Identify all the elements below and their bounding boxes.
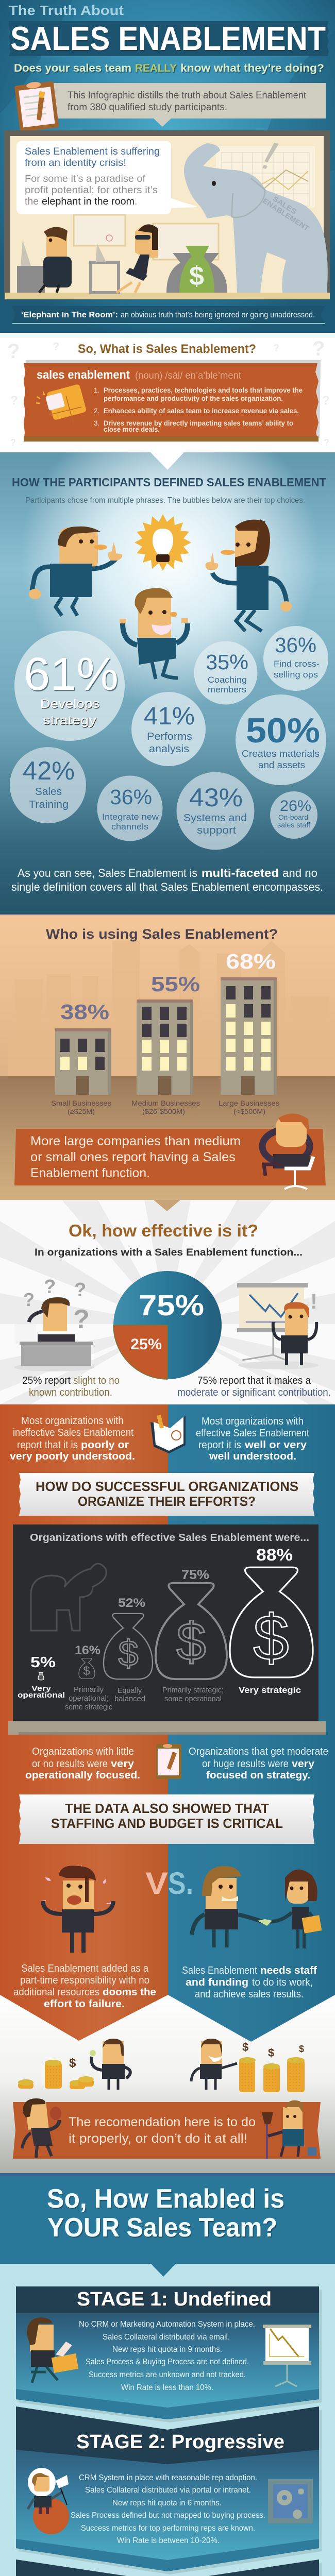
stage text: Success metrics for top performing reps are known. <box>81 2524 255 2533</box>
bubble 26%: On-board <box>278 814 308 821</box>
right results text <box>189 1746 328 1781</box>
definition list <box>94 386 303 433</box>
faint question marks: ? <box>10 437 16 448</box>
bag 52%: 52% <box>118 1596 145 1610</box>
bubble 61% <box>14 631 125 741</box>
pointer <box>154 1200 180 1211</box>
bag 52%: $ <box>119 1633 138 1673</box>
panel: stage 3 <box>16 2560 322 2576</box>
stage text: New reps hit quota in 6 months. <box>112 2499 222 2507</box>
recommendation banner <box>13 2098 321 2159</box>
faint question marks: ? <box>53 340 59 353</box>
stage text: Win Rate is between 10-20%. <box>117 2536 220 2545</box>
left caption <box>22 1375 120 1398</box>
bubble 35%: 35% <box>206 650 248 674</box>
speech bubble: identity crisis: profit potential; for others it’s <box>25 185 158 196</box>
bag 75%: $ <box>176 1612 206 1671</box>
panel: header <box>0 0 335 333</box>
callout box: large companies: More large companies than medium <box>30 1134 241 1148</box>
faint question marks <box>7 337 330 448</box>
chalkboard labels: balanced <box>114 1694 145 1703</box>
pie chart: 75% <box>139 1289 204 1322</box>
bag 88%: $ <box>253 1602 289 1674</box>
speech bubble: identity crisis: Sales Enablement is suffering <box>25 146 160 157</box>
tagline: Does your sales team <box>14 62 131 74</box>
bubble 36% cross-selling: selling ops <box>274 670 318 680</box>
left understanding text: Most organizations with <box>21 1415 124 1427</box>
bubble 36% channels <box>97 776 163 841</box>
versus label: V <box>145 1866 168 1901</box>
stage text: Success metrics are unknown and not tracked. <box>89 2370 246 2379</box>
chalkboard labels: Very <box>31 1684 52 1693</box>
building small: (≥$25M) <box>68 1107 95 1115</box>
left caption: known contribution. <box>29 1387 112 1398</box>
bubble 26%: 26% <box>280 798 311 815</box>
worried man at desk: ? <box>74 1279 86 1301</box>
right staffing text: Sales Enablement <box>182 1965 257 1976</box>
faint question marks: ? <box>312 337 325 360</box>
summary text: multi-faceted <box>202 867 279 879</box>
ribbon heading: staffing and budget <box>19 1794 314 1844</box>
stage text <box>79 2320 255 2392</box>
left caption: 25% report <box>22 1375 71 1386</box>
money bags: $ <box>189 261 204 291</box>
bag 16%: 16% <box>75 1643 100 1657</box>
astronaut on planet <box>28 2468 69 2534</box>
heading line 2: YOUR Sales Team? <box>47 2213 277 2243</box>
panel: elephant in the room scene <box>4 130 330 299</box>
left caption: slight to no <box>73 1375 120 1386</box>
bubble 41%: analysis <box>149 743 189 755</box>
panel: stage 1 <box>16 2286 322 2422</box>
stage text <box>71 2473 265 2545</box>
ribbon heading: organize efforts: ORGANIZE THEIR EFFORTS? <box>78 1494 256 1509</box>
left staffing text: Sales Enablement added as a <box>21 1963 149 1974</box>
summary text: single definition covers all that Sales Enablement encompasses. <box>11 880 323 893</box>
building large: (<$500M) <box>233 1107 265 1115</box>
coins left with angry manager <box>18 2039 130 2090</box>
bubble 26%: sales staff <box>277 821 310 829</box>
bubble 35%: Coaching <box>208 675 247 685</box>
bag 16%: $ <box>83 1664 90 1678</box>
happy man with chart: ! <box>310 1289 317 1313</box>
man centre cheering <box>120 586 188 679</box>
banner: elephant in the room definition <box>12 306 325 324</box>
heading: Ok, how effective is it? <box>69 1221 258 1240</box>
woman with glasses <box>116 224 158 293</box>
worried man at desk: ? <box>23 1289 35 1310</box>
bubble 42%: Training <box>29 799 69 810</box>
intro speech box: This Infographic distills the truth about Sales Enablement <box>68 90 307 101</box>
right results text: focused on strategy. <box>206 1770 310 1781</box>
speech bubble: identity crisis: the <box>25 196 39 207</box>
definition list: Processes, practices, technologies and tools that improve the <box>104 386 303 394</box>
bubble 41%: 41% <box>144 703 195 730</box>
panel: recommendation background <box>0 1989 335 2173</box>
chalkboard labels <box>18 1684 301 1711</box>
panel: what is sales enablement <box>0 333 335 452</box>
bubble 43%: Systems and <box>183 812 247 824</box>
wall pictures and shelf <box>74 215 219 260</box>
bubble 50% <box>236 694 326 785</box>
bubble 42% <box>10 747 86 823</box>
stage text: Sales Process & Buying Process are not defined. <box>86 2358 249 2366</box>
left staffing text: additional resources <box>13 1987 99 1998</box>
building medium <box>131 972 200 1115</box>
icon: light bulb <box>135 514 191 571</box>
bubble 43%: 43% <box>189 783 243 812</box>
panel: stages background <box>0 2264 335 2576</box>
definition list: Drives revenue by directly impacting sales teams’ ability to <box>104 419 293 427</box>
elephant: SALES <box>271 194 298 216</box>
right understanding text: report it is <box>198 1439 241 1451</box>
chalkboard labels: operational; <box>69 1694 109 1703</box>
definition list: performance and productivity of the sales organization. <box>104 395 283 402</box>
ribbon heading: staffing and budget: THE DATA ALSO SHOWED THAT <box>65 1801 269 1816</box>
man right with beard <box>205 519 292 631</box>
speech bubble: identity crisis: . <box>135 196 137 207</box>
chalkboard labels: Equally <box>118 1686 142 1695</box>
chalkboard chart <box>8 1524 328 1735</box>
bubble 61%: 61% <box>24 649 119 700</box>
definition list: close more deals. <box>104 426 160 433</box>
coins right with happy manager: $ <box>242 2041 248 2054</box>
bubble 26% <box>270 791 317 839</box>
intro speech box: from 380 qualified study participants. <box>68 102 227 113</box>
building small: Small Businesses <box>51 1099 111 1107</box>
bubbles chart <box>10 626 328 850</box>
coins right with happy manager: $ <box>299 2044 304 2054</box>
skyline <box>8 941 335 1076</box>
banner: elephant in the room definition: ‘Elephant In The Room’: <box>21 311 118 319</box>
stage title: STAGE 1: Undefined <box>77 2289 272 2310</box>
chalkboard labels: Primarily <box>74 1685 104 1694</box>
icon: small clipboard <box>156 1744 181 1779</box>
right staffing text: and funding <box>186 1977 248 1988</box>
heading: Who is using Sales Enablement? <box>46 926 278 942</box>
stage text: Win Rate is less than 10%. <box>121 2383 213 2392</box>
bubble 43% <box>176 772 255 850</box>
tagline <box>14 62 324 74</box>
right staffing text: needs staff <box>260 1965 317 1976</box>
framed gears <box>268 2479 313 2523</box>
coins right with happy manager: $ <box>268 2046 274 2059</box>
intro speech box <box>50 83 326 127</box>
heading line 1: So, How Enabled is <box>47 2184 284 2214</box>
elephant <box>184 143 328 293</box>
man with box <box>27 2317 78 2383</box>
bag 52% <box>104 1596 153 1679</box>
left staffing text: effort to failure. <box>44 1998 125 2010</box>
building large: 68% <box>226 950 276 973</box>
boxer man <box>22 2098 61 2158</box>
man relaxing in chair <box>262 1113 313 1189</box>
faint question marks: ? <box>324 437 329 448</box>
right caption <box>177 1375 331 1398</box>
stage text: Sales Process defined but not mapped to buying process. <box>71 2511 265 2520</box>
bubble 36% channels: 36% <box>110 785 152 809</box>
subheading: In organizations with a Sales Enablement function... <box>35 1247 303 1258</box>
right understanding text: Most organizations with <box>202 1416 304 1427</box>
left understanding text: report that it is <box>17 1439 78 1451</box>
summary text <box>11 867 323 893</box>
definition card: sales enablement <box>37 368 130 381</box>
callout box: large companies: or small ones report having a Sales <box>30 1150 236 1164</box>
bubble 50%: and assets <box>258 760 305 770</box>
bag 5% <box>30 1654 56 1680</box>
faint question marks: ? <box>7 340 20 363</box>
sub heading: Participants chose from multiple phrases. The bubbles below are their top choices. <box>25 496 305 505</box>
ribbon heading: organize efforts: HOW DO SUCCESSFUL ORGANIZATIONS <box>36 1479 298 1494</box>
panel: who is using sales enablement <box>0 914 335 1200</box>
summary text: As you can see, Sales Enablement is <box>18 867 197 879</box>
speech bubble: identity crisis <box>16 141 198 214</box>
left results text: Organizations with little <box>32 1746 134 1757</box>
definition list: 1. <box>94 386 99 394</box>
definition card <box>24 360 321 442</box>
banner: elephant in the room definition: an obvious truth that’s being ignored or going unaddressed. <box>121 311 315 319</box>
faint question marks: ? <box>322 394 330 408</box>
panel: how enabled is your team <box>0 2173 335 2264</box>
left results text: operationally focused. <box>25 1770 140 1781</box>
right understanding text: well or very <box>244 1439 307 1451</box>
chart falling <box>263 2325 311 2386</box>
stage title: STAGE 2: Progressive <box>76 2431 284 2453</box>
bag 5%: 5% <box>30 1654 56 1671</box>
right staffing text: to do its work, <box>252 1977 313 1988</box>
chalkboard labels: Primarily strategic; <box>162 1686 224 1694</box>
bag 75% <box>156 1568 227 1679</box>
stage text: CRM System in place with reasonable rep adoption. <box>79 2473 257 2482</box>
definition card: (noun) /sāl/ en’a’ble’ment <box>135 370 242 381</box>
right staffing text <box>182 1965 317 2000</box>
building large <box>219 950 279 1115</box>
left understanding text: very poorly understood. <box>10 1451 135 1462</box>
stressed man <box>41 1865 113 1953</box>
pointer <box>151 2264 176 2277</box>
bag 75%: 75% <box>181 1568 209 1582</box>
building medium: ($26-$500M) <box>142 1107 185 1115</box>
right caption: 75% report that it makes a <box>197 1375 311 1386</box>
right understanding text: effective Sales Enablement <box>196 1428 309 1439</box>
panel: coins and recommendation <box>13 2039 321 2159</box>
right results text: or huge results were <box>202 1758 289 1770</box>
faint question marks: ? <box>10 394 18 408</box>
left understanding text: poorly or <box>81 1439 129 1451</box>
bag 16% <box>75 1643 100 1679</box>
ribbon heading: organize efforts <box>19 1473 314 1516</box>
cleaner with broom <box>262 2100 316 2159</box>
coins right with happy manager <box>191 2039 305 2092</box>
callout box: large companies: Enablement function. <box>30 1166 150 1180</box>
summary text: and no <box>282 867 317 879</box>
bubble 35%: members <box>208 685 246 694</box>
left results text <box>25 1746 140 1781</box>
heading: HOW THE PARTICIPANTS DEFINED SALES ENABLEMENT <box>12 476 326 489</box>
pie chart <box>113 1271 222 1379</box>
bubble 61%: Develops <box>40 697 99 711</box>
speech bubble: identity crisis: For some it’s a paradise of <box>25 174 146 184</box>
bubble 41% <box>131 692 206 766</box>
definition list: Enhances ability of sales team to increase revenue via sales. <box>104 407 299 415</box>
bag 88% <box>230 1546 313 1677</box>
stage text: No CRM or Marketing Automation System in place. <box>79 2320 255 2329</box>
right results text: Organizations that get moderate <box>189 1746 328 1757</box>
left staffing text: dooms the <box>103 1987 156 1998</box>
building large: Large Businesses <box>219 1099 279 1107</box>
versus label: S. <box>168 1866 193 1901</box>
bubble 36% channels: channels <box>111 822 148 832</box>
bubble 42%: Sales <box>35 786 62 798</box>
worried man at desk: ? <box>44 1276 56 1298</box>
bubble 36% cross-selling: Find cross- <box>274 659 320 669</box>
stage text: New reps hit quota in 9 months. <box>112 2345 222 2354</box>
ribbon heading: staffing and budget: STAFFING AND BUDGET IS CRITICAL <box>51 1816 283 1831</box>
handshake pair <box>192 1866 322 1948</box>
worried man at desk: ? <box>73 1304 90 1334</box>
sunburst rays <box>0 1200 335 1404</box>
chalkboard labels: some operational <box>164 1694 222 1703</box>
building medium: 55% <box>151 972 200 996</box>
stage text: Sales Collateral distributed via email. <box>103 2333 230 2342</box>
left staffing text <box>13 1963 156 2010</box>
bubble 42%: 42% <box>23 756 75 785</box>
icon: puzzle <box>36 384 87 422</box>
right understanding text <box>196 1416 309 1462</box>
stage text: Sales Collateral distributed via portal or intranet. <box>85 2486 251 2495</box>
bubble 36% cross-selling: 36% <box>275 633 316 657</box>
speech bubble: identity crisis: elephant in the room <box>42 196 135 207</box>
left understanding text <box>10 1415 135 1462</box>
bubble 36% cross-selling <box>263 626 328 691</box>
bag 88%: 88% <box>256 1546 293 1564</box>
pointer <box>150 452 184 470</box>
callout box: large companies <box>14 1113 326 1189</box>
desk and laptop <box>91 235 119 293</box>
left staffing text: part-time responsibility with no <box>20 1975 149 1986</box>
speech bubble: identity crisis: from an identity crisis! <box>25 158 126 168</box>
panel: how effective is it <box>0 1200 335 1404</box>
tagline: know what they're doing? <box>180 62 324 74</box>
happy man with chart <box>237 1283 319 1369</box>
bubble 50%: Creates materials <box>242 749 320 759</box>
tagline: REALLY <box>135 62 177 74</box>
recommendation banner: it properly, or don’t do it at all! <box>69 2131 247 2146</box>
heading: So, What is Sales Enablement? <box>78 342 256 356</box>
panel: split comparison <box>0 1404 335 2042</box>
icon: clipboard <box>14 80 59 132</box>
wall chart <box>216 143 315 208</box>
elephant: ENABLEMENT <box>261 196 311 233</box>
left results text: or no results were <box>32 1758 108 1770</box>
right understanding text: well understood. <box>209 1451 296 1462</box>
building medium: Medium Businesses <box>131 1099 200 1107</box>
chalkboard labels: some strategic <box>65 1703 112 1711</box>
bubble 50%: 50% <box>246 711 320 750</box>
worried man at desk <box>14 1276 94 1371</box>
panel: how participants defined sales enablement <box>0 452 335 914</box>
bubble 43%: support <box>197 825 236 836</box>
versus label <box>145 1866 193 1901</box>
chalkboard labels: Very strategic <box>239 1685 301 1695</box>
chalkboard labels: operational <box>18 1691 65 1700</box>
recommendation banner: The recomendation here is to do <box>69 2115 256 2129</box>
man at desk <box>17 227 72 293</box>
bubble 35% <box>194 641 258 705</box>
bubble 61%: strategy <box>43 714 96 727</box>
bubble 41%: Performs <box>147 731 192 742</box>
chalkboard chart: Organizations with effective Sales Enablement were... <box>30 1532 309 1544</box>
faint question marks: ? <box>273 343 279 354</box>
panel: stage 2 <box>16 2406 322 2574</box>
chalk elephant <box>31 1564 106 1631</box>
pie chart: 25% <box>130 1336 162 1353</box>
building small: 38% <box>60 1000 109 1024</box>
money bags <box>166 246 227 293</box>
man left <box>29 527 122 616</box>
definition list: 3. <box>94 419 99 427</box>
left understanding text: ineffective Sales Enablement <box>13 1427 133 1438</box>
icon: book with bulb <box>150 1415 186 1453</box>
title: The Truth About: The Truth About <box>9 3 124 18</box>
right staffing text: and achieve sales results. <box>195 1989 304 2000</box>
left results text: very <box>111 1758 135 1770</box>
building small <box>51 1000 111 1115</box>
definition list: 2. <box>94 407 99 415</box>
right results text: very <box>292 1758 315 1770</box>
coins left with angry manager: $ <box>69 2056 76 2070</box>
bubble 36% channels: Integrate new <box>102 812 159 822</box>
